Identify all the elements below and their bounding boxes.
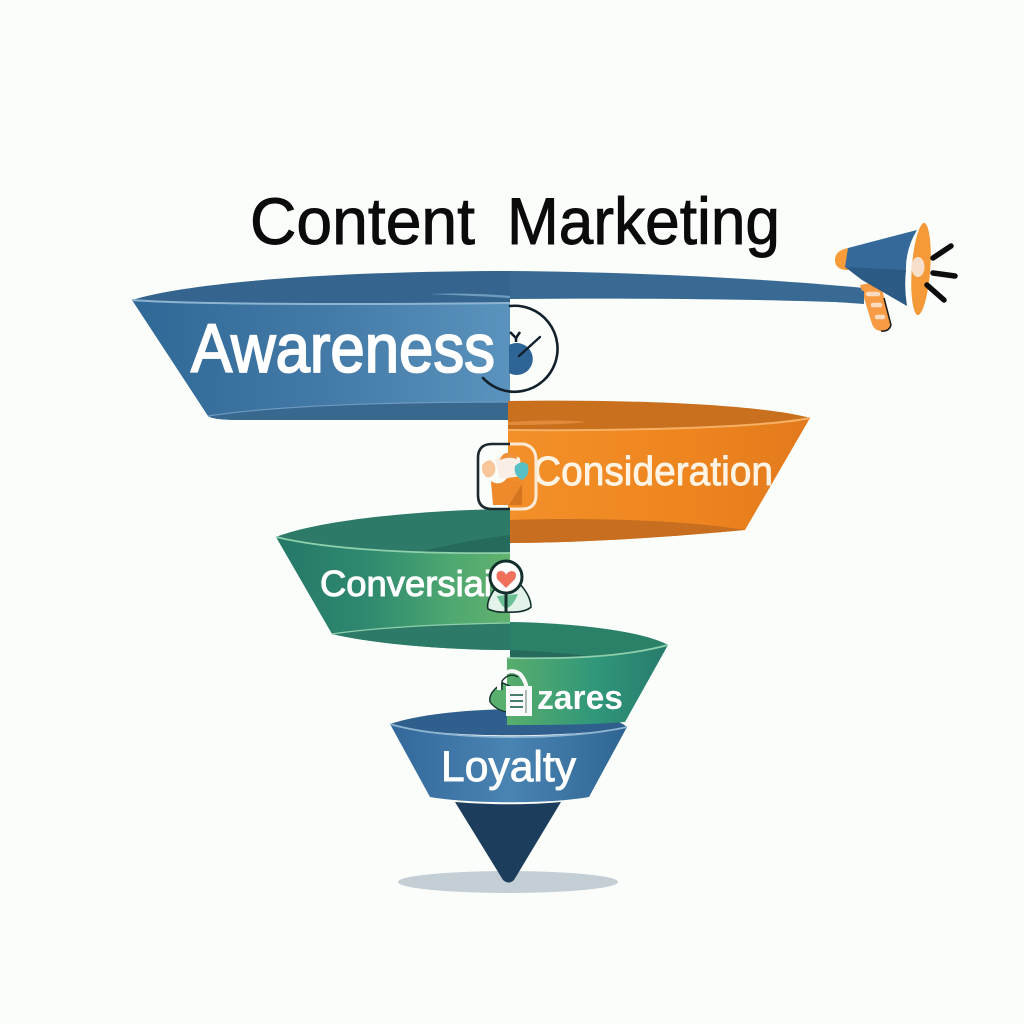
label: zares: zares (537, 679, 623, 717)
icon: consideration badge (478, 444, 536, 509)
funnel tip cone (455, 802, 561, 882)
panel: zares stage (507, 622, 668, 725)
label: awareness: Awareness (191, 310, 495, 387)
megaphone handle (860, 281, 891, 331)
shadow under funnel tip (398, 871, 618, 893)
label: loyalty: Loyalty (441, 743, 576, 791)
megaphone highlight (912, 257, 924, 277)
label: consideration: Consideration (533, 449, 773, 494)
title (250, 184, 780, 258)
title: Marketing (507, 184, 780, 258)
panel: awareness stage (132, 271, 510, 420)
megaphone back cap (835, 248, 849, 270)
title: Content (250, 184, 475, 258)
megaphone flare (908, 221, 934, 317)
panel: consideration stage (508, 401, 810, 543)
icon: padlock and document (490, 671, 532, 716)
sound rays (927, 246, 955, 300)
megaphone cone (845, 230, 917, 272)
ribbon: top band leading to megaphone (510, 271, 864, 303)
label: conversion: Conversiai (320, 563, 492, 604)
panel: conversion stage (276, 509, 510, 650)
ribbon end over handle (780, 283, 864, 304)
panel: loyalty stage (390, 709, 627, 802)
icon: megaphone (780, 221, 955, 331)
icon: heart magnifier (488, 561, 531, 612)
icon: target dial (483, 306, 558, 392)
